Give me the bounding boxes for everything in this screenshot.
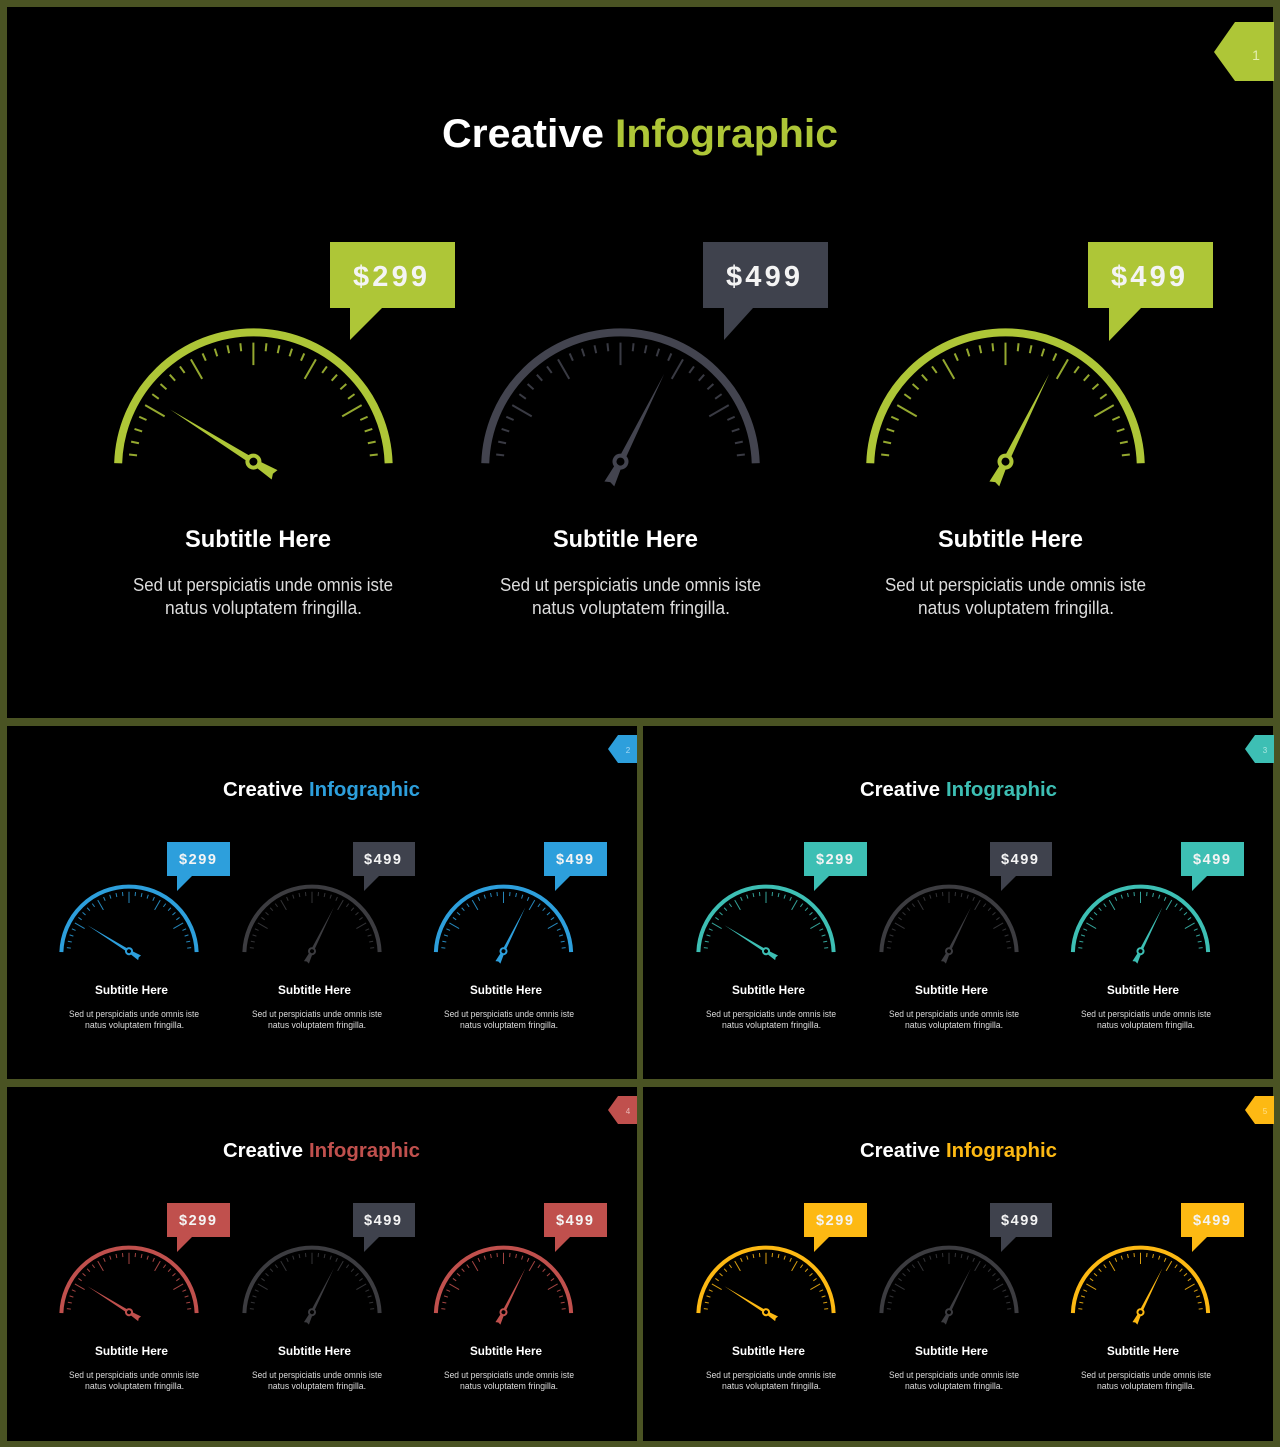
price callout 2 bbox=[990, 842, 1052, 891]
gauge 1 bbox=[118, 332, 389, 482]
text block 1: Subtitle Here bbox=[732, 1344, 805, 1358]
text block 3 bbox=[444, 983, 574, 1030]
text block 3 bbox=[1081, 1344, 1211, 1391]
gauge 3 bbox=[870, 332, 1141, 488]
price callout 3: $499 bbox=[1111, 261, 1185, 293]
gauge 2 bbox=[244, 887, 380, 964]
text block 3: Sed ut perspiciatis unde omnis iste bbox=[444, 1370, 574, 1380]
page tab 5: 5 bbox=[1263, 1107, 1268, 1116]
gauge 3 bbox=[1073, 1248, 1208, 1325]
text block 1: Sed ut perspiciatis unde omnis iste bbox=[706, 1370, 836, 1380]
price callout 3 bbox=[1181, 842, 1244, 891]
price callout 3 bbox=[1181, 1203, 1244, 1252]
title bbox=[223, 1140, 420, 1162]
text block 2: natus voluptatem fringilla. bbox=[268, 1020, 366, 1030]
text block 3: Subtitle Here bbox=[1107, 983, 1179, 997]
text block 3 bbox=[885, 526, 1146, 618]
page tab 5 bbox=[1245, 1096, 1274, 1124]
text block 3 bbox=[444, 1344, 574, 1391]
price callout 3: $499 bbox=[1193, 1213, 1230, 1229]
title: Infographic bbox=[946, 1140, 1057, 1162]
price callout 1 bbox=[167, 1203, 230, 1252]
price callout 1: $299 bbox=[179, 852, 216, 868]
text block 3: Sed ut perspiciatis unde omnis iste bbox=[1081, 1009, 1211, 1019]
text block 1: Subtitle Here bbox=[95, 983, 168, 997]
text block 3: natus voluptatem fringilla. bbox=[460, 1381, 558, 1391]
page tab 1 bbox=[1214, 22, 1274, 81]
price callout 2: $499 bbox=[1001, 852, 1038, 868]
gauge 2 bbox=[881, 1248, 1017, 1325]
gauge 3 bbox=[436, 887, 571, 964]
text block 1 bbox=[69, 1344, 199, 1391]
text block 1: Sed ut perspiciatis unde omnis iste bbox=[69, 1009, 199, 1019]
text block 3: Sed ut perspiciatis unde omnis iste bbox=[444, 1009, 574, 1019]
title: Infographic bbox=[946, 779, 1057, 801]
title: Infographic bbox=[309, 1140, 420, 1162]
price callout 2: $499 bbox=[1001, 1213, 1038, 1229]
text block 2: Sed ut perspiciatis unde omnis iste bbox=[889, 1370, 1019, 1380]
title: Creative bbox=[223, 1140, 303, 1162]
text block 1: natus voluptatem fringilla. bbox=[722, 1381, 821, 1391]
text block 2 bbox=[252, 983, 382, 1030]
text block 2 bbox=[889, 983, 1019, 1030]
text block 1: Subtitle Here bbox=[185, 526, 331, 553]
text block 1 bbox=[133, 526, 393, 618]
text block 2: Sed ut perspiciatis unde omnis iste bbox=[252, 1370, 382, 1380]
text block 2: Subtitle Here bbox=[278, 983, 351, 997]
text block 1: natus voluptatem fringilla. bbox=[722, 1020, 821, 1030]
text block 2: natus voluptatem fringilla. bbox=[905, 1381, 1003, 1391]
price callout 2 bbox=[703, 242, 828, 340]
price callout 1 bbox=[330, 242, 455, 340]
panel: blue slide bbox=[7, 726, 637, 1079]
page tab 1: 1 bbox=[1252, 47, 1260, 63]
text block 2: Sed ut perspiciatis unde omnis iste bbox=[500, 575, 761, 595]
text block 2: Subtitle Here bbox=[915, 983, 988, 997]
text block 3: Sed ut perspiciatis unde omnis iste bbox=[885, 575, 1146, 595]
price callout 1: $299 bbox=[353, 261, 427, 293]
page tab 2: 2 bbox=[626, 746, 631, 755]
price callout 1 bbox=[804, 1203, 867, 1252]
text block 1: natus voluptatem fringilla. bbox=[85, 1381, 184, 1391]
price callout 3: $499 bbox=[556, 852, 593, 868]
page tab 3: 3 bbox=[1263, 746, 1268, 755]
text block 3 bbox=[1081, 983, 1211, 1030]
price callout 2: $499 bbox=[364, 852, 401, 868]
gauge 1 bbox=[61, 1248, 197, 1322]
text block 1: natus voluptatem fringilla. bbox=[165, 598, 362, 618]
gauge 3 bbox=[1073, 887, 1208, 964]
text block 2 bbox=[252, 1344, 382, 1391]
text block 1: Sed ut perspiciatis unde omnis iste bbox=[69, 1370, 199, 1380]
price callout 1 bbox=[804, 842, 867, 891]
text block 2: natus voluptatem fringilla. bbox=[268, 1381, 366, 1391]
title: Infographic bbox=[615, 112, 838, 156]
price callout 3 bbox=[544, 1203, 607, 1252]
price callout 2: $499 bbox=[364, 1213, 401, 1229]
price callout 2 bbox=[990, 1203, 1052, 1252]
text block 3: natus voluptatem fringilla. bbox=[460, 1020, 558, 1030]
panel: red slide bbox=[7, 1087, 637, 1441]
page tab 4 bbox=[608, 1096, 637, 1124]
gauge 3 bbox=[436, 1248, 571, 1325]
text block 2: Subtitle Here bbox=[553, 526, 698, 553]
text block 2: natus voluptatem fringilla. bbox=[532, 598, 730, 618]
text block 2: natus voluptatem fringilla. bbox=[905, 1020, 1003, 1030]
text block 3: Subtitle Here bbox=[938, 526, 1083, 553]
price callout 1: $299 bbox=[816, 1213, 853, 1229]
text block 3: natus voluptatem fringilla. bbox=[1097, 1381, 1195, 1391]
page tab 2 bbox=[608, 735, 637, 763]
text block 1: Subtitle Here bbox=[95, 1344, 168, 1358]
page tab 3 bbox=[1245, 735, 1274, 763]
price callout 3: $499 bbox=[1193, 852, 1230, 868]
text block 2: Sed ut perspiciatis unde omnis iste bbox=[889, 1009, 1019, 1019]
text block 1: natus voluptatem fringilla. bbox=[85, 1020, 184, 1030]
gauge 1 bbox=[698, 887, 834, 961]
text block 1 bbox=[706, 1344, 836, 1391]
text block 2: Sed ut perspiciatis unde omnis iste bbox=[252, 1009, 382, 1019]
title bbox=[223, 779, 420, 801]
text block 3: Subtitle Here bbox=[470, 983, 542, 997]
page tab 4: 4 bbox=[626, 1107, 631, 1116]
text block 2 bbox=[889, 1344, 1019, 1391]
price callout 2 bbox=[353, 1203, 415, 1252]
price callout 1: $299 bbox=[816, 852, 853, 868]
text block 3: natus voluptatem fringilla. bbox=[1097, 1020, 1195, 1030]
price callout 3 bbox=[1088, 242, 1213, 341]
panel: yellow slide bbox=[643, 1087, 1274, 1441]
text block 1 bbox=[69, 983, 199, 1030]
text block 2: Subtitle Here bbox=[278, 1344, 351, 1358]
panel: teal slide bbox=[643, 726, 1274, 1079]
title bbox=[860, 1140, 1057, 1162]
title: Creative bbox=[223, 779, 303, 801]
price callout 2 bbox=[353, 842, 415, 891]
text block 3: Subtitle Here bbox=[470, 1344, 542, 1358]
text block 1: Sed ut perspiciatis unde omnis iste bbox=[706, 1009, 836, 1019]
text block 1 bbox=[706, 983, 836, 1030]
price callout 1: $299 bbox=[179, 1213, 216, 1229]
text block 2: Subtitle Here bbox=[915, 1344, 988, 1358]
title bbox=[860, 779, 1057, 801]
gauge 2 bbox=[244, 1248, 380, 1325]
title bbox=[442, 112, 838, 156]
text block 2 bbox=[500, 526, 761, 618]
title: Creative bbox=[442, 112, 604, 156]
text block 3: Sed ut perspiciatis unde omnis iste bbox=[1081, 1370, 1211, 1380]
text block 3: natus voluptatem fringilla. bbox=[918, 598, 1114, 618]
price callout 3: $499 bbox=[556, 1213, 593, 1229]
gauge 2 bbox=[881, 887, 1017, 964]
text block 3: Subtitle Here bbox=[1107, 1344, 1179, 1358]
price callout 2: $499 bbox=[726, 261, 800, 293]
title: Infographic bbox=[309, 779, 420, 801]
text block 1: Sed ut perspiciatis unde omnis iste bbox=[133, 575, 393, 595]
price callout 1 bbox=[167, 842, 230, 891]
gauge 1 bbox=[61, 887, 197, 961]
panel: main slide green bbox=[7, 7, 1274, 718]
text block 1: Subtitle Here bbox=[732, 983, 805, 997]
title: Creative bbox=[860, 779, 940, 801]
price callout 3 bbox=[544, 842, 607, 891]
gauge 1 bbox=[698, 1248, 834, 1322]
gauge 2 bbox=[485, 332, 756, 488]
title: Creative bbox=[860, 1140, 940, 1162]
